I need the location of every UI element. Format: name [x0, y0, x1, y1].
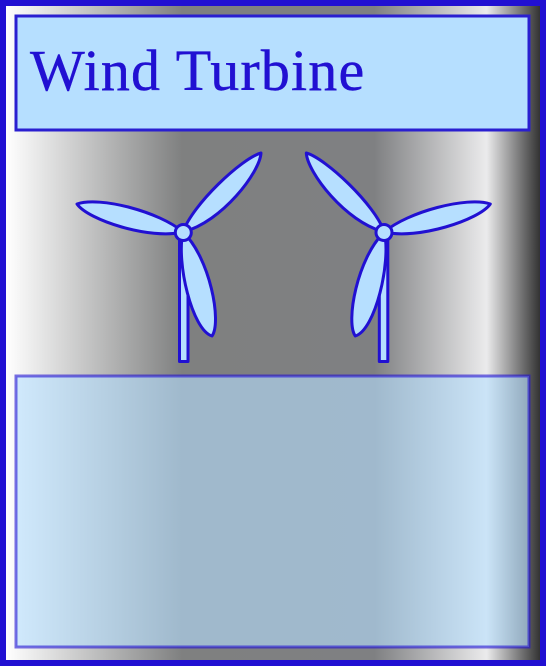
- title panel: [16, 16, 529, 130]
- icon: left wind turbine: [77, 153, 261, 362]
- title: Wind Turbine: [30, 38, 365, 103]
- icon: right wind turbine: [306, 153, 490, 362]
- empty content panel: [16, 376, 529, 647]
